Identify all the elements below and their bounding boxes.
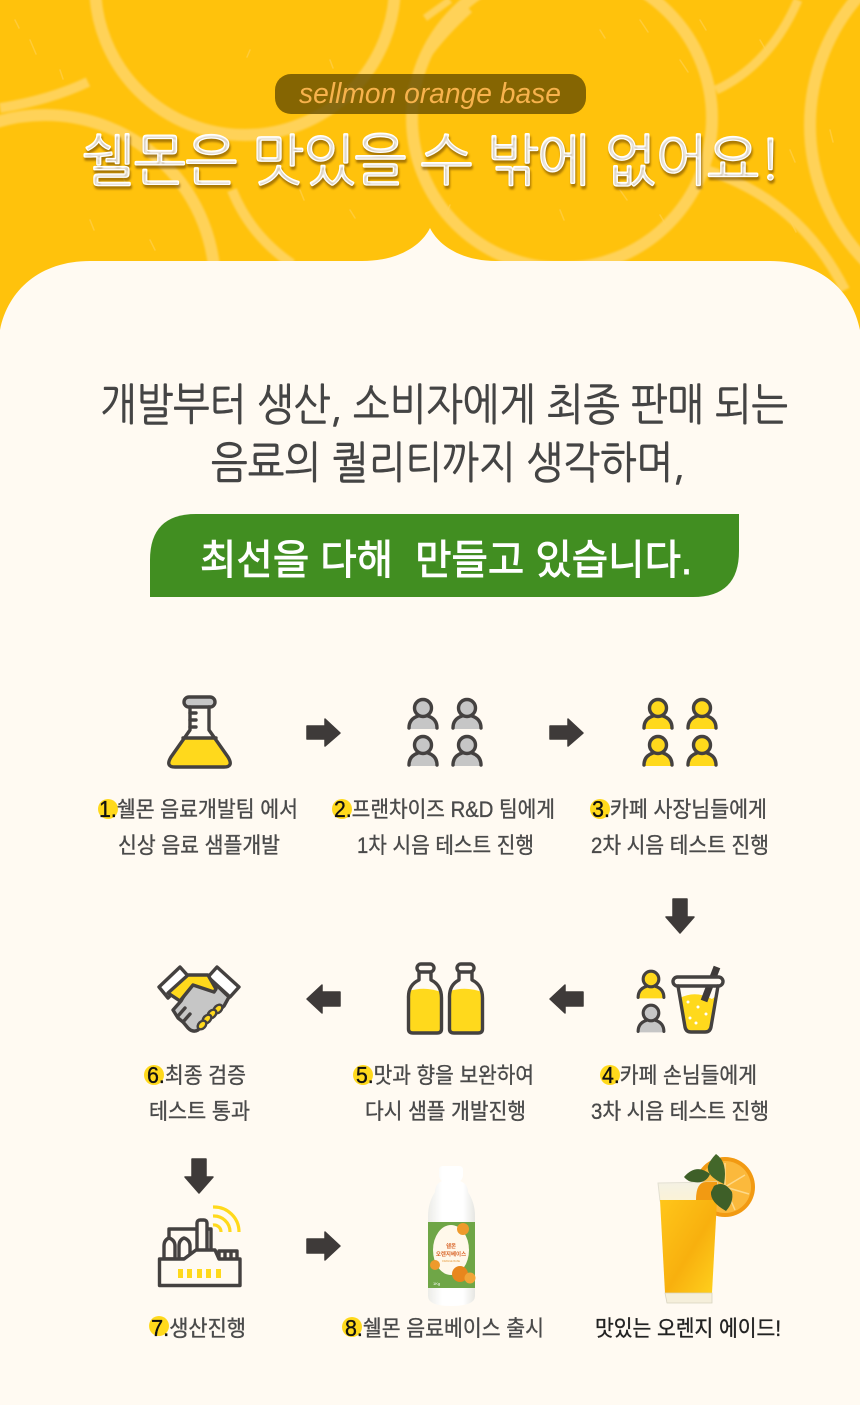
step 5 label: 다시 샘플 개발진행 [365, 1099, 526, 1124]
arrow 7 to 8 [307, 1232, 340, 1260]
arrow 2 to 3 [550, 719, 583, 746]
step 4 label: 4.카페 손님들에게 [602, 1062, 757, 1088]
arrow 1 to 2 [307, 719, 340, 746]
icon: gray people [409, 700, 481, 766]
step 6 label: 테스트 통과 [149, 1099, 250, 1124]
icon: handshake [159, 967, 239, 1031]
icon: customers and cup [638, 967, 723, 1032]
step 8 label: 8.쉘몬 음료베이스 출시 [345, 1315, 544, 1341]
green banner [150, 514, 739, 597]
step 7 label: 7.생산진행 [151, 1315, 246, 1341]
step 1 label [98, 796, 298, 858]
icon: yellow people [644, 700, 716, 766]
product bottle: 1Kg [433, 1281, 440, 1286]
icon: two bottles [408, 964, 482, 1033]
arrow 3 to 4 [666, 899, 694, 933]
step 2 label: 2.프랜차이즈 R&D 팀에게 [334, 796, 555, 822]
intro text [100, 383, 788, 485]
intro text: 음료의 퀄리티까지 생각하며, [211, 441, 685, 485]
arrow 4 to 5 [550, 985, 583, 1013]
step 3 label [590, 796, 769, 858]
step 1 label: 1.쉘몬 음료개발팀 에서 [99, 796, 298, 822]
step 6 label: 6.최종 검증 [147, 1062, 246, 1088]
title: 쉘몬은 맛있을 수 밖에 없어요! [82, 133, 782, 189]
product bottle [428, 1166, 476, 1306]
intro text: 개발부터 생산, 소비자에게 최종 판매 되는 [100, 383, 788, 427]
product bottle: ORANGE BASE [442, 1260, 460, 1263]
step 3 label: 2차 시음 테스트 진행 [591, 833, 769, 858]
step 3 label: 3.카페 사장님들에게 [592, 796, 767, 822]
arrow 6 to 7 [185, 1159, 213, 1193]
step 2 label: 1차 시음 테스트 진행 [357, 833, 534, 858]
icon: factory [160, 1207, 240, 1286]
step 2 label [332, 796, 555, 858]
step 4 label: 3차 시음 테스트 진행 [591, 1099, 769, 1124]
product bottle: 쉘몬 [446, 1242, 456, 1250]
step 5 label [353, 1062, 534, 1124]
orange drink glass [658, 1154, 755, 1303]
step 6 label [144, 1062, 250, 1124]
icon: flask [169, 697, 230, 767]
step 1 label: 신상 음료 샘플개발 [118, 833, 280, 858]
step 5 label: 5.맛과 향을 보완하여 [356, 1062, 534, 1088]
pill label: sellmon orange base [299, 78, 561, 110]
product bottle: 오렌지베이스 [436, 1250, 466, 1258]
green banner: 최선을 다해 만들고 있습니다. [200, 537, 692, 583]
pill label [275, 74, 586, 114]
orange slice background [0, 0, 860, 455]
arrow 5 to 6 [307, 985, 340, 1013]
final label: 맛있는 오렌지 에이드! [595, 1316, 781, 1341]
step 4 label [591, 1062, 769, 1124]
